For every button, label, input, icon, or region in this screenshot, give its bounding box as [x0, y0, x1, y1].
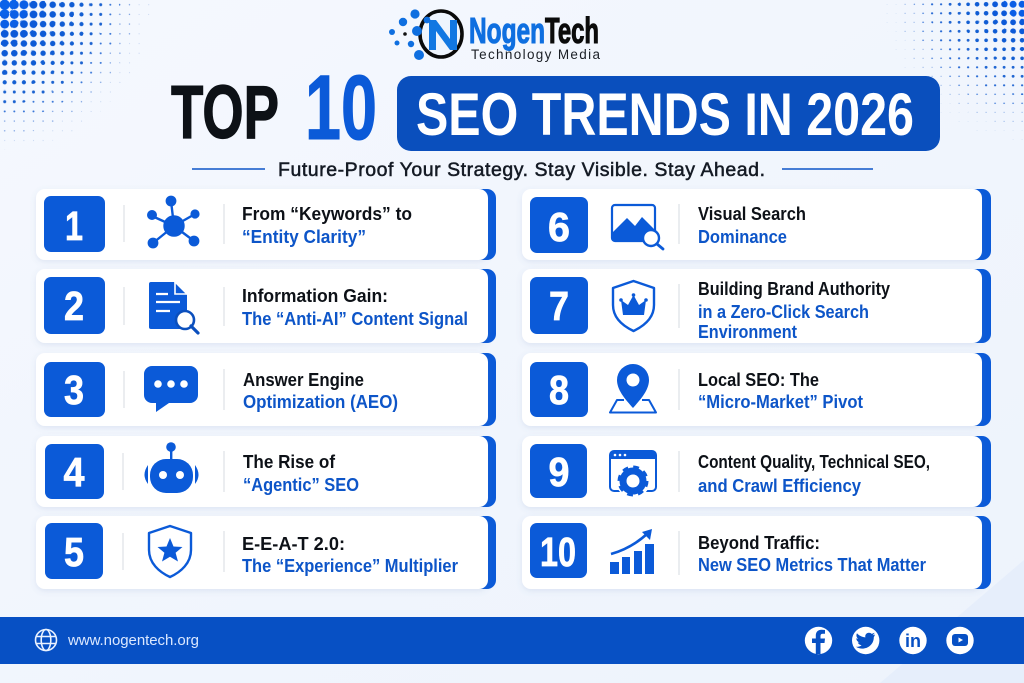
panel: trend 1: 1 — [65, 203, 83, 249]
text: Dominance — [698, 227, 787, 247]
text — [242, 204, 412, 247]
panel: trend 2: 2 — [64, 283, 84, 329]
panel: trend 3 — [36, 353, 496, 426]
text: Environment — [698, 322, 797, 342]
halftone top left — [0, 0, 150, 150]
logo — [389, 9, 600, 62]
halftone top right — [884, 0, 1024, 140]
icon: map pin — [610, 364, 656, 412]
text — [698, 533, 926, 575]
text: The “Anti-AI” Content Signal — [242, 309, 468, 329]
text — [243, 370, 398, 412]
website url: www.nogentech.org — [67, 632, 199, 649]
icon: globe — [36, 630, 56, 650]
icon: browser gear — [610, 451, 656, 498]
footer bar — [0, 617, 1024, 664]
panel: trend 9: 9 — [548, 449, 570, 495]
panel: trend 8: 8 — [549, 367, 569, 413]
panel: trend 4 — [36, 436, 496, 507]
title: top: TOP — [171, 70, 279, 154]
icon: youtube — [946, 627, 974, 654]
text: Content Quality, Technical SEO, — [698, 452, 930, 472]
icon: robot — [144, 442, 198, 493]
icon: network — [148, 197, 198, 247]
icon: linkedin: in — [905, 631, 921, 651]
icon: shield star — [149, 526, 191, 577]
panel: trend 7 — [522, 269, 991, 343]
icon: shield crown — [613, 281, 654, 331]
logo tagline: Technology Media — [471, 47, 600, 62]
panel: trend 2 — [36, 269, 496, 343]
panel: trend 9 — [522, 436, 991, 507]
title: 10: 10 — [305, 57, 377, 159]
text: The Rise of — [243, 452, 336, 472]
icon: linkedin — [899, 627, 927, 654]
panel: trend 4: 4 — [64, 449, 85, 495]
panel: trend 8 — [522, 353, 991, 426]
text: “Agentic” SEO — [243, 475, 359, 495]
panel: trend 6 — [522, 189, 991, 260]
logo ring — [420, 11, 462, 57]
title banner: SEO TRENDS IN 2026 — [416, 81, 914, 148]
text: From “Keywords” to — [242, 204, 412, 224]
logo dots — [389, 9, 430, 60]
text: Optimization (AEO) — [243, 392, 398, 412]
text: Visual Search — [698, 204, 806, 224]
logo wordmark tech: Tech — [545, 10, 599, 51]
panel: trend 10 — [522, 516, 991, 589]
icon: facebook — [805, 627, 832, 654]
panel: trend 1 — [36, 189, 496, 260]
text: in a Zero-Click Search — [698, 302, 869, 322]
panel: trend 7: 7 — [549, 283, 569, 329]
text — [242, 286, 468, 329]
icon: growth chart — [610, 529, 654, 574]
text: Information Gain: — [242, 286, 388, 306]
subtitle: Future-Proof Your Strategy. Stay Visible. Stay Ahead. — [278, 159, 765, 181]
text: Building Brand Authority — [698, 279, 890, 299]
text: E-E-A-T 2.0: — [242, 534, 345, 554]
icon: twitter — [852, 627, 879, 654]
text: Local SEO: The — [698, 370, 819, 390]
icon: document search — [149, 282, 198, 333]
text: The “Experience” Multiplier — [242, 556, 458, 576]
text — [698, 452, 930, 496]
icon: chat bubble — [144, 366, 198, 412]
text — [698, 370, 863, 412]
text: “Micro-Market” Pivot — [698, 392, 863, 412]
text — [698, 204, 806, 247]
icon: image search — [612, 205, 663, 249]
text: Beyond Traffic: — [698, 533, 820, 553]
panel: trend 6: 6 — [548, 204, 570, 250]
text — [243, 452, 359, 495]
text: New SEO Metrics That Matter — [698, 555, 926, 575]
panel: trend 3: 3 — [64, 367, 84, 413]
logo wordmark: Nogen — [469, 10, 545, 51]
panel: trend 10: 10 — [540, 529, 576, 575]
text: and Crawl Efficiency — [698, 476, 861, 496]
panel: trend 5: 5 — [64, 529, 84, 575]
text — [242, 534, 458, 576]
panel: trend 5 — [36, 516, 496, 589]
text: “Entity Clarity” — [242, 227, 366, 247]
text — [698, 279, 890, 342]
text: Answer Engine — [243, 370, 364, 390]
